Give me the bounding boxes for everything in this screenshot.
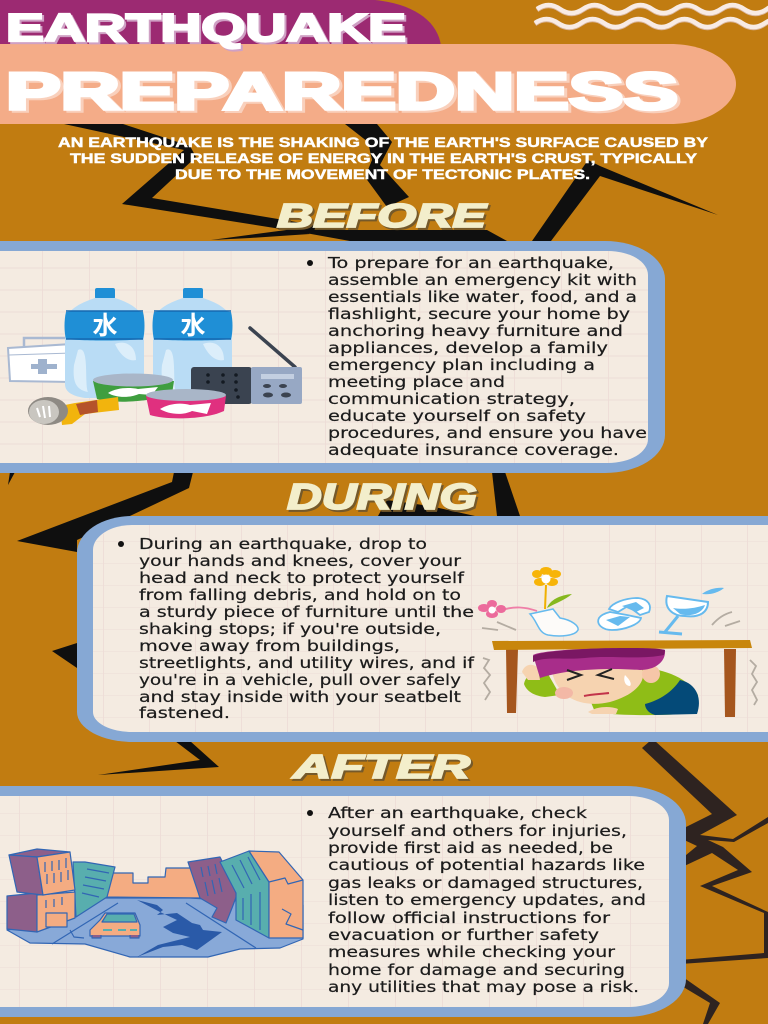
illustration: emergency kit <box>8 288 302 425</box>
intro text: DUE TO THE MOVEMENT OF TECTONIC PLATES. <box>175 167 590 182</box>
pink flower <box>478 600 537 618</box>
bullet text: before: meeting place and <box>328 373 505 391</box>
green can <box>93 374 174 402</box>
brown cracks lower right <box>642 741 768 1024</box>
magenta banner <box>0 0 441 46</box>
person <box>522 648 699 715</box>
bullet text: after: evacuation or further safety <box>328 926 599 944</box>
bullet text: during: your hands and knees, cover your <box>139 552 462 570</box>
bullet text: before: flashlight, secure your home by <box>328 305 630 323</box>
crack: upper left <box>64 124 507 241</box>
water bottle right <box>152 288 232 398</box>
title: earthquake: EARTHQUAKE <box>6 7 406 50</box>
table <box>492 640 752 717</box>
panel: after <box>0 786 686 1017</box>
crack: mid left <box>17 472 193 552</box>
black ground cracks <box>8 124 718 775</box>
bullet text: after: any utilities that may pose a risk. <box>328 978 639 996</box>
bullet text: during: and stay inside with your seatbelt <box>139 688 461 706</box>
wave decoration <box>535 5 768 27</box>
bullet text: before: educate yourself on safety <box>328 407 586 425</box>
bullet text: after: measures while checking your <box>328 943 616 961</box>
panel: before <box>0 241 665 473</box>
water bottle right: 水 <box>180 306 206 342</box>
bullet text: after: home for damage and securing <box>328 961 625 979</box>
yellow flower <box>532 567 572 609</box>
bullet text: before: appliances, develop a family <box>328 339 608 357</box>
first aid box <box>8 338 72 382</box>
heading: during: DURING <box>287 476 477 517</box>
bullet text: during: fastened. <box>139 704 230 722</box>
left upper building <box>9 849 75 895</box>
bullet text: during <box>118 535 475 722</box>
bullet text: after: listen to emergency updates, and <box>328 891 646 909</box>
bullet text: during: shaking stops; if you're outside, <box>139 620 441 638</box>
bullet text: before: anchoring heavy furniture and <box>328 322 623 340</box>
crack: lower right main <box>642 741 768 964</box>
title banner <box>0 0 736 124</box>
bullet text: before <box>307 254 647 459</box>
pink can <box>146 389 226 418</box>
crack: left of during panel <box>52 643 77 668</box>
shake marks <box>482 612 757 705</box>
bullet text: after: cautious of potential hazards like <box>328 856 645 874</box>
bullet text: during: head and neck to protect yourself <box>139 569 465 587</box>
bullet text: during: move away from buildings, <box>139 637 400 655</box>
bullet text: during: from falling debris, and hold on to <box>139 586 461 604</box>
right orange building <box>249 851 303 938</box>
wine glass <box>659 588 724 634</box>
bullet text: before: assemble an emergency kit with <box>328 271 637 289</box>
sidewalk edges <box>52 903 256 948</box>
crack: upper right <box>532 160 718 241</box>
ground fissure <box>137 900 222 957</box>
crack: mid right <box>492 472 520 516</box>
bullet text: after: follow official instructions for <box>328 909 611 927</box>
bullet text: before: communication strategy, <box>328 390 575 408</box>
back wall <box>105 868 200 898</box>
intro text: AN EARTHQUAKE IS THE SHAKING OF THE EARTH'S SURFACE CAUSED BY <box>58 135 708 150</box>
bullet text: during: a sturdy piece of furniture until the <box>139 603 474 621</box>
panel: during <box>77 516 768 742</box>
bullet text: before: emergency plan including a <box>328 356 595 374</box>
heading: after: AFTER <box>291 748 470 785</box>
bullet text: during: streetlights, and utility wires, and if <box>139 654 475 672</box>
bullet text: before: To prepare for an earthquake, <box>327 254 614 272</box>
right purple building <box>188 857 238 923</box>
radio <box>191 328 302 404</box>
bullet text: before: procedures, and ensure you have <box>328 424 647 442</box>
broken plate <box>598 598 650 630</box>
bullet text: after: provide first aid as needed, be <box>328 839 613 857</box>
crack: thin sliver above before panel <box>211 229 310 240</box>
bullet text: after: yourself and others for injuries, <box>328 822 627 840</box>
water bottle left <box>64 288 144 398</box>
illustration: person under table <box>478 567 757 717</box>
intro text: THE SUDDEN RELEASE OF ENERGY IN THE EARTH'S CRUST, TYPICALLY <box>70 151 697 166</box>
left lower building <box>7 892 75 932</box>
crack: upper centre <box>345 124 409 207</box>
bullet text: before: essentials like water, food, and a <box>328 288 637 306</box>
bullet text: after: gas leaks or damaged structures, <box>328 874 643 892</box>
heading: before: BEFORE <box>277 197 487 234</box>
car <box>90 913 140 938</box>
bullet text: after: After an earthquake, check <box>328 804 587 822</box>
bullet text: before: adequate insurance coverage. <box>328 441 619 459</box>
right teal building <box>220 851 269 938</box>
vase <box>530 609 578 636</box>
crack: small left sliver <box>8 472 15 485</box>
intro text <box>58 135 708 182</box>
crack: lower right tail <box>680 975 720 1024</box>
crack: behind during heading <box>378 500 475 516</box>
water bottle left: 水 <box>92 306 118 342</box>
title: preparedness: PREPAREDNESS <box>6 63 678 121</box>
peach banner <box>0 44 736 124</box>
crack: below during panel <box>98 741 219 775</box>
bullet text: after <box>307 804 646 996</box>
flashlight <box>28 397 119 425</box>
teal building left <box>73 862 115 917</box>
street <box>7 898 303 957</box>
bullet text: during: you're in a vehicle, pull over safely <box>139 671 461 689</box>
bullet text: during: During an earthquake, drop to <box>139 535 427 553</box>
illustration: damaged city street <box>7 849 303 957</box>
